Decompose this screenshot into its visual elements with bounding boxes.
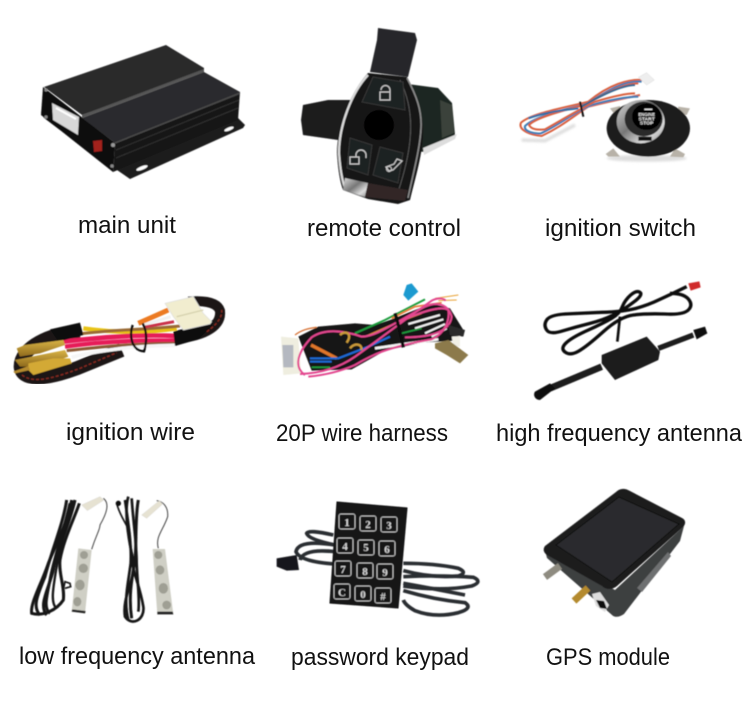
icon: main unit box: [41, 45, 245, 179]
icon: keypad with cable: 0: [360, 589, 366, 601]
label: main unit: main unit: [78, 212, 176, 239]
icon: start stop button with wires: START: [639, 116, 655, 122]
icon: low frequency antenna pair: [32, 497, 173, 621]
icon: high frequency antenna: [534, 281, 707, 400]
panel: ignition switch: [520, 73, 696, 242]
icon: keypad with cable: 8: [362, 566, 368, 578]
panel: high frequency antenna: [496, 281, 743, 447]
panel: ignition wire: [13, 297, 222, 446]
icon: key fob: [301, 28, 457, 204]
icon: GPS module box: [544, 489, 685, 617]
panel: remote control: [301, 28, 461, 242]
icon: keypad with cable: 2: [365, 519, 371, 531]
icon: keypad with cable: 3: [386, 520, 392, 532]
panel: password keypad: [277, 502, 478, 671]
label: ignition switch: ignition switch: [545, 215, 696, 242]
icon: keypad with cable: C: [338, 587, 346, 599]
label: remote control: remote control: [307, 215, 461, 242]
icon: ignition wire loom: [13, 297, 222, 380]
panel: low frequency antenna: [19, 497, 256, 670]
panel: 20P wire harness: [276, 283, 468, 447]
label: high frequency antenna: high frequency antenna: [496, 420, 743, 447]
icon: keypad with cable: 5: [363, 542, 369, 554]
icon: keypad with cable: 4: [342, 541, 348, 553]
label: 20P wire harness: 20P wire harness: [276, 420, 448, 447]
icon: keypad with cable: #: [380, 591, 386, 603]
icon: keypad with cable: 6: [384, 544, 390, 556]
label: GPS module: GPS module: [546, 644, 670, 671]
icon: keypad with cable: 7: [340, 564, 346, 576]
icon: keypad with cable: [277, 502, 478, 615]
icon: keypad with cable: 1: [344, 517, 350, 529]
panel: GPS module: [544, 489, 685, 671]
icon: start stop button with wires: ENGINE: [638, 112, 655, 117]
label: password keypad: password keypad: [291, 644, 469, 671]
icon: wire harness: [281, 283, 468, 377]
panel: main unit: [41, 45, 245, 239]
label: ignition wire: ignition wire: [66, 419, 195, 446]
label: low frequency antenna: low frequency antenna: [19, 643, 256, 670]
icon: keypad with cable: 9: [382, 567, 388, 579]
icon: start stop button with wires: STOP: [640, 121, 654, 127]
icon: start stop button with wires: [520, 73, 690, 162]
